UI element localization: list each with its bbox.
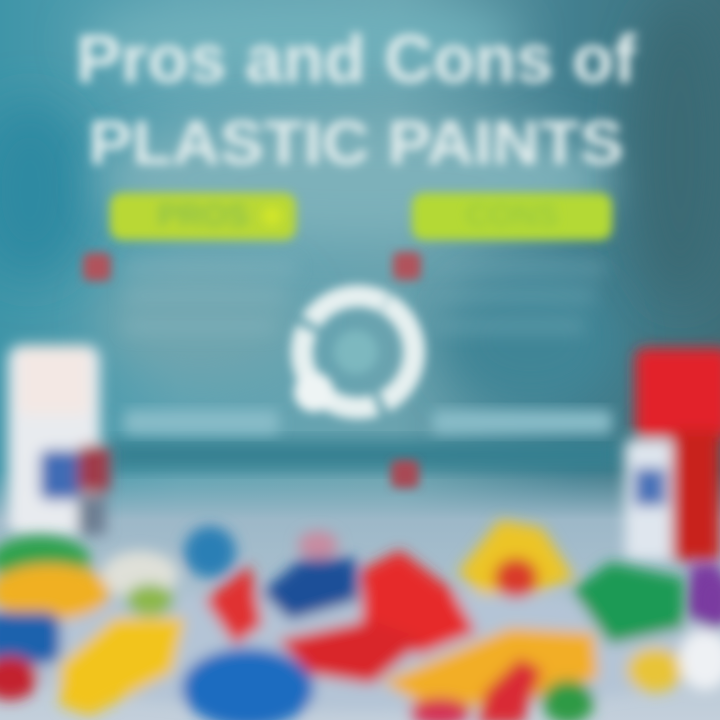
right paint bottle [625,348,720,625]
text block: right list [435,262,605,332]
title: PLASTIC PAINTS [88,109,624,178]
icon: red marker left [83,253,111,281]
title: Pros and Cons of [76,21,636,97]
plastic pieces [0,520,720,720]
badge: cons: CONS [466,197,558,233]
caption left [124,410,279,434]
badge: cons [412,193,612,240]
badge: pros: PROS [158,197,248,233]
icon: recycle circle [282,276,434,428]
badge: pros [110,193,296,240]
title [76,21,636,178]
left paint bottle [8,345,110,535]
icon: red marker bottom [391,460,419,488]
caption right [432,410,612,434]
icon: red marker right [393,252,421,280]
text block: left list [125,262,295,332]
